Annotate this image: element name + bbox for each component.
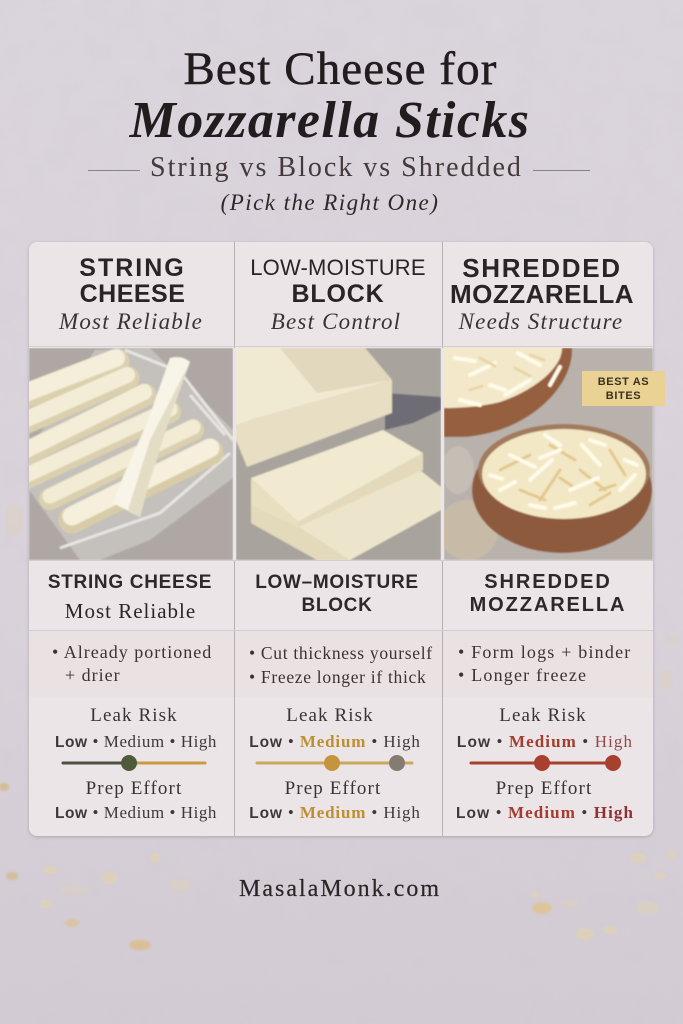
lower tagline: Most Reliable	[65, 599, 196, 623]
lower heading: MOZZARELLA	[470, 594, 626, 616]
leak risk label: Leak Risk	[286, 705, 374, 726]
heading: SHREDDED	[462, 253, 622, 283]
lower heading: STRING CHEESE	[48, 572, 212, 593]
best as bites badge	[582, 371, 665, 406]
prep effort label: Prep Effort	[285, 778, 381, 799]
tagline: Best Control	[271, 309, 401, 334]
leak risk slider	[256, 755, 414, 771]
bullets: • Already portioned	[52, 642, 212, 662]
column 3: shredded mozzarella	[450, 253, 634, 822]
title	[128, 43, 530, 149]
prep effort scale: Low • Medium • High	[55, 803, 217, 822]
lower heading	[470, 571, 626, 616]
lower heading: BLOCK	[301, 595, 373, 616]
bullets	[458, 642, 631, 685]
prep effort label: Prep Effort	[86, 778, 182, 799]
photo: string cheese	[20, 348, 233, 560]
leak risk slider	[62, 755, 206, 771]
best as bites badge: BITES	[606, 390, 641, 402]
prep effort scale: Low • Medium • High	[249, 803, 421, 822]
heading	[79, 254, 186, 308]
heading: STRING	[79, 254, 186, 282]
leak risk label: Leak Risk	[499, 705, 587, 726]
subtitle: String vs Block vs Shredded	[150, 152, 523, 183]
bullets: + drier	[65, 665, 121, 685]
footer website: MasalaMonk.com	[239, 876, 441, 902]
bullets: • Freeze longer if thick	[249, 667, 426, 687]
prep effort label: Prep Effort	[496, 778, 592, 799]
lower heading: SHREDDED	[484, 571, 612, 593]
bullets	[249, 643, 433, 687]
parenthetical: (Pick the Right One)	[221, 190, 439, 215]
leak risk scale: Low • Medium • High	[55, 732, 217, 751]
title line 2: Mozzarella Sticks	[130, 92, 530, 149]
leak risk label: Leak Risk	[90, 705, 178, 726]
column 1: string cheese	[48, 254, 217, 822]
leak risk scale: Low • Medium • High	[249, 732, 421, 751]
lower heading: LOW–MOISTURE	[255, 572, 419, 593]
bullets: • Cut thickness yourself	[249, 643, 433, 663]
leak risk slider	[470, 755, 621, 771]
heading: LOW-MOISTURE	[250, 255, 426, 280]
bullets: • Longer freeze	[458, 665, 587, 685]
tagline: Needs Structure	[459, 309, 623, 334]
best as bites badge: BEST AS	[598, 376, 649, 388]
column 2: low-moisture block	[249, 255, 433, 822]
heading: CHEESE	[80, 280, 185, 308]
photo: low-moisture block	[236, 348, 441, 560]
heading	[250, 255, 426, 308]
lower heading	[255, 572, 419, 616]
heading: BLOCK	[292, 280, 384, 308]
bullets	[52, 642, 212, 685]
bullets: • Form logs + binder	[458, 642, 631, 662]
tagline: Most Reliable	[59, 309, 203, 334]
prep effort scale: Low • Medium • High	[456, 803, 634, 822]
photo: shredded mozzarella	[438, 348, 653, 560]
photos	[29, 348, 653, 560]
title line 1: Best Cheese for	[183, 43, 498, 95]
heading: MOZZARELLA	[450, 279, 634, 309]
leak risk scale: Low • Medium • High	[457, 732, 633, 751]
comparison card	[29, 242, 653, 836]
heading	[450, 253, 634, 309]
